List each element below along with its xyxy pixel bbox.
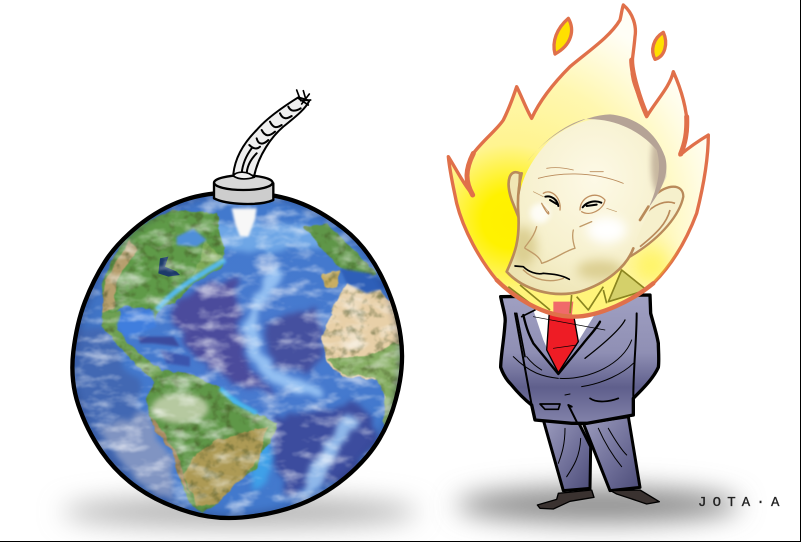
jacket lapels and folds (513, 310, 637, 422)
white shirt (533, 310, 597, 373)
mediterranean (340, 268, 390, 293)
small flame right (653, 32, 666, 59)
africa (320, 282, 400, 426)
jacket (501, 295, 659, 423)
large flame (448, 5, 708, 317)
right shoe (611, 490, 659, 504)
ground shadow: figure (456, 487, 740, 523)
fuse base (233, 172, 254, 179)
flame lower rim (497, 280, 653, 317)
right ear (630, 187, 683, 257)
earth map (74, 196, 400, 516)
face shading (510, 133, 666, 280)
trousers (543, 417, 640, 491)
south america (147, 370, 277, 513)
hair (527, 114, 666, 208)
fuse (233, 90, 311, 177)
coastal shallows (157, 260, 225, 310)
great lakes (158, 257, 180, 277)
right flame glow (633, 247, 673, 287)
flame stroke accents (467, 60, 687, 195)
ocean (74, 196, 390, 516)
greenland (232, 208, 257, 237)
ground shadow: globe (62, 497, 418, 527)
amazon haze (152, 393, 208, 423)
head (507, 118, 667, 294)
gulf and caribbean (117, 310, 190, 367)
bomb cap (214, 175, 273, 204)
right ear inner (640, 202, 675, 247)
left shoe (537, 490, 594, 509)
small flame left (554, 18, 572, 54)
globe edge shading (72, 192, 402, 518)
cloud texture (74, 196, 400, 516)
north america (102, 210, 225, 382)
left ear (509, 172, 520, 217)
collar inside flame (508, 268, 644, 314)
globe outline (72, 192, 402, 518)
hudson bay (177, 228, 207, 247)
trouser creases (558, 428, 627, 477)
suit figure (501, 295, 659, 509)
signature: JOTA·A (698, 495, 786, 511)
deep water and currents (70, 220, 377, 507)
facial features (515, 168, 623, 281)
red tie (547, 312, 578, 373)
globe bomb (60, 90, 420, 530)
europe (303, 223, 377, 288)
flame around head (448, 5, 708, 320)
head outline (507, 173, 648, 294)
